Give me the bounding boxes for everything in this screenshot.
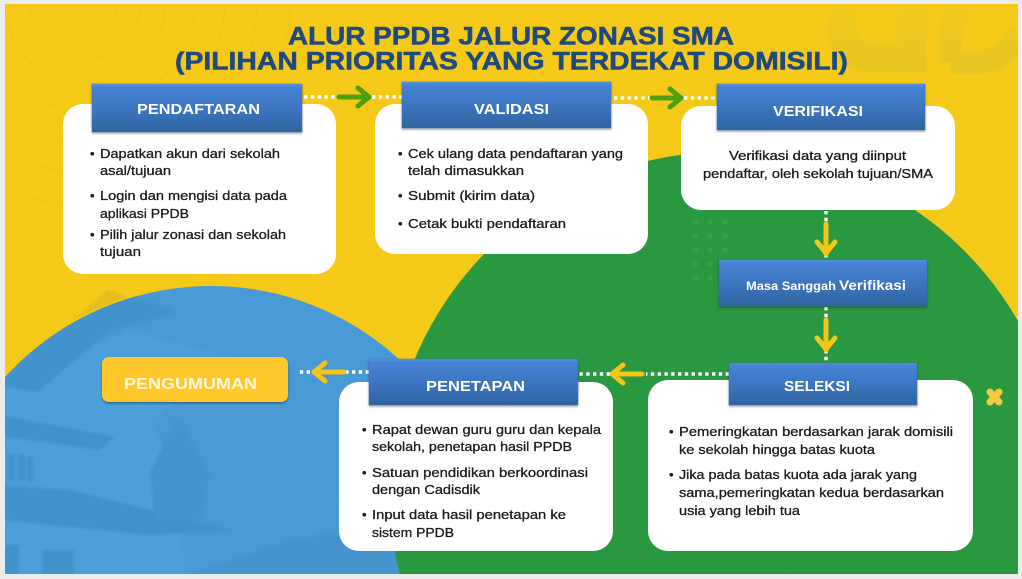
heading: penetapan <box>369 359 578 405</box>
list: penetapan steps: • <box>362 507 367 522</box>
arrow: penetapan to pengumuman <box>299 363 369 381</box>
list: penetapan steps: sekolah, penetapan hasil PPDB <box>372 439 572 454</box>
list: validasi steps: • <box>398 216 403 231</box>
list: seleksi steps: • <box>669 467 674 482</box>
list: seleksi steps: sama,pemeringkatan kedua berdasarkan <box>679 485 944 500</box>
heading: verifikasi <box>717 84 925 130</box>
list: penetapan steps: Satuan pendidikan berkoordinasi <box>372 465 588 480</box>
panel: pendaftaran <box>63 84 336 274</box>
list: penetapan steps: • <box>362 465 367 480</box>
list: validasi steps: • <box>398 146 403 161</box>
arrow: masa sanggah to seleksi <box>817 307 835 363</box>
list: validasi steps: Cetak bukti pendaftaran <box>408 216 566 231</box>
list: penetapan steps <box>362 422 602 540</box>
panel: seleksi <box>648 363 973 551</box>
list: seleksi steps <box>669 424 953 518</box>
heading: masa sanggah verifikasi <box>719 260 927 306</box>
arrow: validasi to verifikasi <box>614 89 717 107</box>
list: pendaftaran steps: • <box>90 188 95 203</box>
list: validasi steps: Cek ulang data pendaftaran yang <box>408 146 623 161</box>
list: validasi steps <box>398 146 623 231</box>
heading: pendaftaran <box>92 84 302 132</box>
list: penetapan steps: Rapat dewan guru guru dan kepala <box>372 422 602 437</box>
heading: pendaftaran: PENDAFTARAN <box>137 101 260 118</box>
list: penetapan steps: dengan Cadisdik <box>372 482 481 497</box>
list: seleksi steps: usia yang lebih tua <box>679 503 801 518</box>
heading: penetapan: PENETAPAN <box>426 378 525 395</box>
title: ALUR PPDB JALUR ZONASI SMA <box>288 22 734 50</box>
list: penetapan steps: Input data hasil penetapan ke <box>372 507 566 522</box>
list: seleksi steps: ke sekolah hingga batas kuota <box>679 442 876 457</box>
text: verifikasi description <box>703 148 933 181</box>
title <box>175 22 848 76</box>
arrow: seleksi to penetapan <box>579 365 729 383</box>
blue circle with building <box>5 286 400 574</box>
arrow: pendaftaran to validasi <box>304 88 402 106</box>
list: seleksi steps: • <box>669 424 674 439</box>
heading: masa sanggah verifikasi: Masa Sanggah <box>746 279 836 293</box>
heading: verifikasi: VERIFIKASI <box>773 103 863 120</box>
list: pendaftaran steps <box>90 146 288 259</box>
arrow: verifikasi to masa sanggah <box>817 211 835 260</box>
heading: masa sanggah verifikasi: Verifikasi <box>839 277 906 293</box>
heading: seleksi: SELEKSI <box>784 378 850 395</box>
heading: seleksi <box>729 363 917 405</box>
list: pendaftaran steps: Dapatkan akun dari sekolah <box>100 146 280 161</box>
text: verifikasi description: Verifikasi data yang diinput <box>729 148 906 163</box>
list: validasi steps: telah dimasukkan <box>408 163 524 178</box>
heading: validasi: VALIDASI <box>474 101 549 118</box>
list: seleksi steps: Jika pada batas kuota ada jarak yang <box>679 467 917 482</box>
green circle <box>389 152 1018 574</box>
list: validasi steps: • <box>398 188 403 203</box>
list: pendaftaran steps: Pilih jalur zonasi dan sekolah <box>100 227 286 242</box>
panel: penetapan <box>339 359 613 551</box>
icon: yellow cross <box>990 392 999 402</box>
panel: verifikasi <box>681 84 955 210</box>
list: penetapan steps: • <box>362 422 367 437</box>
list: pendaftaran steps: • <box>90 146 95 161</box>
list: pendaftaran steps: tujuan <box>100 244 141 259</box>
text: verifikasi description: pendaftar, oleh sekolah tujuan/SMA <box>703 166 933 181</box>
list: penetapan steps: sistem PPDB <box>372 525 454 540</box>
button: pengumuman <box>102 357 288 402</box>
list: pendaftaran steps: Login dan mengisi data pada <box>100 188 288 203</box>
panel: validasi <box>375 82 648 254</box>
list: seleksi steps: Pemeringkatan berdasarkan jarak domisili <box>679 424 953 439</box>
list: pendaftaran steps: • <box>90 227 95 242</box>
list: pendaftaran steps: aplikasi PPDB <box>100 206 189 221</box>
button: pengumuman: PENGUMUMAN <box>124 376 257 393</box>
title: (PILIHAN PRIORITAS YANG TERDEKAT DOMISILI) <box>175 48 848 76</box>
heading: validasi <box>402 82 611 128</box>
list: pendaftaran steps: asal/tujuan <box>100 163 171 178</box>
list: validasi steps: Submit (kirim data) <box>408 188 535 203</box>
